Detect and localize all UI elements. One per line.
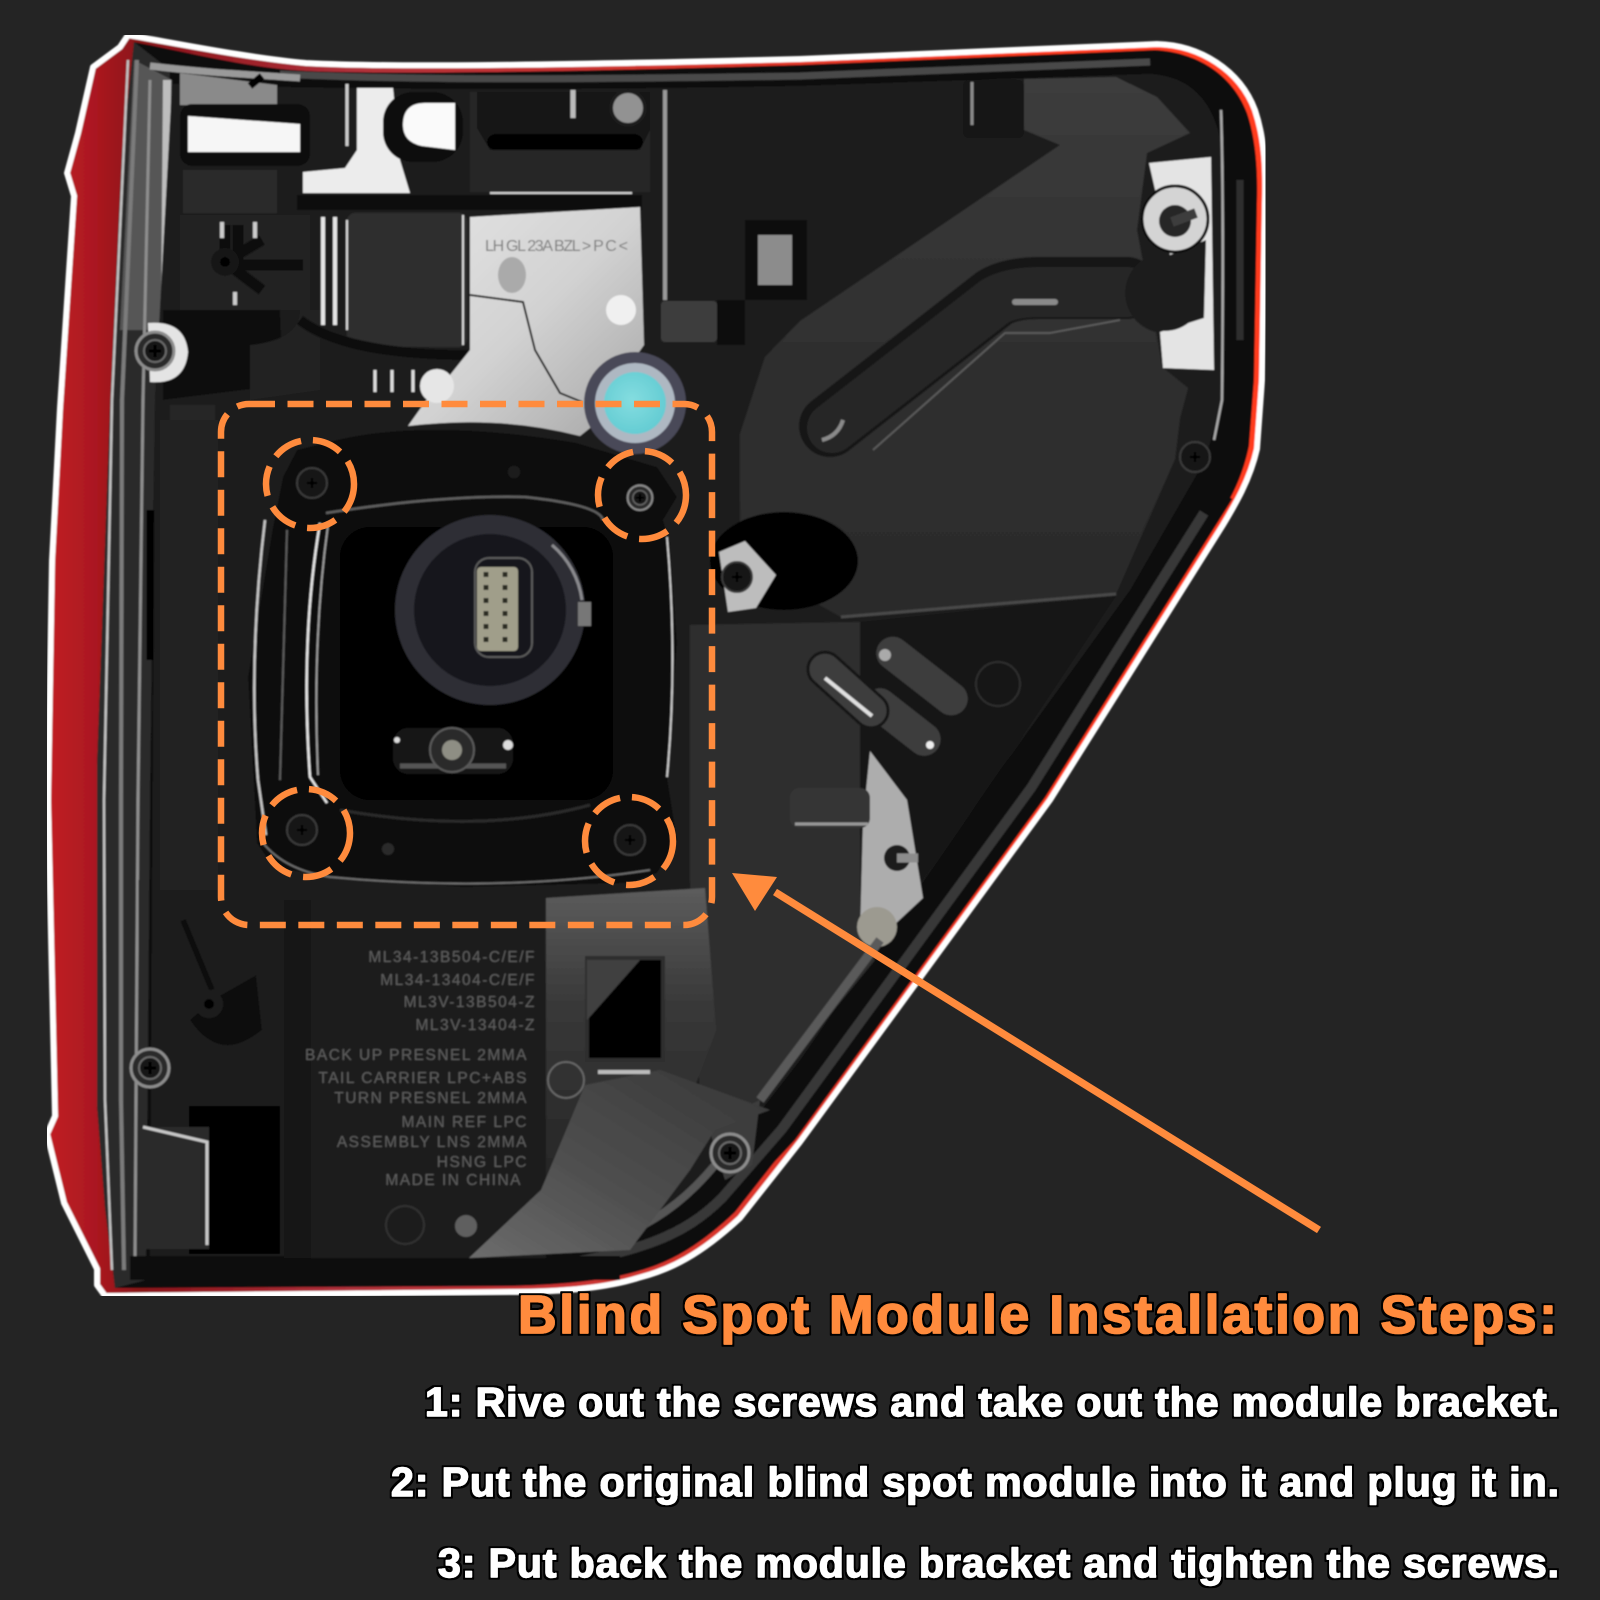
left column bbox=[140, 420, 262, 1045]
lower centre panel with embossed text: HSNG LPC bbox=[437, 1154, 528, 1171]
right diagonal rim bbox=[500, 490, 1218, 1270]
small metal tab and screw bbox=[719, 541, 776, 612]
right metal bracket bbox=[1127, 110, 1240, 440]
light centre plate: LH GL 23A BZL > P C < bbox=[485, 238, 628, 255]
connector pins bbox=[475, 558, 532, 657]
embossed tube bbox=[822, 253, 1205, 450]
dashed highlight box bbox=[221, 404, 712, 925]
lower centre panel with embossed text: BACK UP PRESNEL 2MMA bbox=[305, 1047, 528, 1064]
upper left moulding bbox=[163, 73, 650, 540]
right grey panel bbox=[661, 77, 1190, 617]
module bracket bbox=[248, 430, 677, 887]
lower centre panel with embossed text: TURN PRESNEL 2MMA bbox=[334, 1090, 528, 1107]
tail light photo bbox=[47, 35, 1265, 1296]
connector ring bbox=[395, 515, 591, 705]
lower left block bbox=[130, 1106, 620, 1280]
heading: Blind Spot Module Installation Steps: bbox=[518, 1286, 1557, 1345]
bolt bar bbox=[393, 728, 513, 774]
lamp housing bbox=[97, 42, 1257, 1288]
screw highlight circles bbox=[262, 440, 686, 885]
step 3: 3: Put back the module bracket and tighten the screws. bbox=[438, 1540, 1559, 1586]
lower centre panel with embossed text: MAIN REF LPC bbox=[401, 1114, 528, 1131]
light centre plate bbox=[408, 207, 644, 436]
lower centre panel with embossed text: MADE IN CHINA bbox=[385, 1172, 522, 1189]
interior base bbox=[150, 74, 1222, 1262]
chrome left rim bbox=[97, 42, 172, 1288]
lower centre panel with embossed text: ML3V-13404-Z bbox=[415, 1017, 536, 1034]
lower centre panel with embossed text: ML34-13B504-C/E/F bbox=[368, 949, 536, 966]
top speckled rim bbox=[150, 62, 1150, 79]
housing screws bbox=[131, 323, 1210, 1180]
bracket screws bbox=[287, 466, 652, 855]
lower centre panel with embossed text: ML34-13404-C/E/F bbox=[380, 972, 536, 989]
lower centre grey area bbox=[690, 594, 1116, 1135]
embossed bumps bbox=[801, 628, 976, 765]
blue vent cap bbox=[584, 352, 686, 454]
lower centre panel with embossed text: TAIL CARRIER LPC+ABS bbox=[318, 1070, 528, 1087]
bracket opening bbox=[340, 527, 613, 800]
arrow bbox=[732, 873, 1319, 1230]
lower centre panel with embossed text bbox=[284, 888, 770, 1258]
step 1: 1: Rive out the screws and take out the module bracket. bbox=[425, 1379, 1559, 1425]
lamp outline and red lens bbox=[47, 35, 1265, 1296]
lower centre panel with embossed text: ASSEMBLY LNS 2MMA bbox=[337, 1134, 528, 1151]
lower centre panel with embossed text: ML3V-13B504-Z bbox=[404, 994, 536, 1011]
black blob behind bracket bbox=[710, 512, 858, 610]
step 2: 2: Put the original blind spot module into it and plug it in. bbox=[391, 1459, 1559, 1505]
